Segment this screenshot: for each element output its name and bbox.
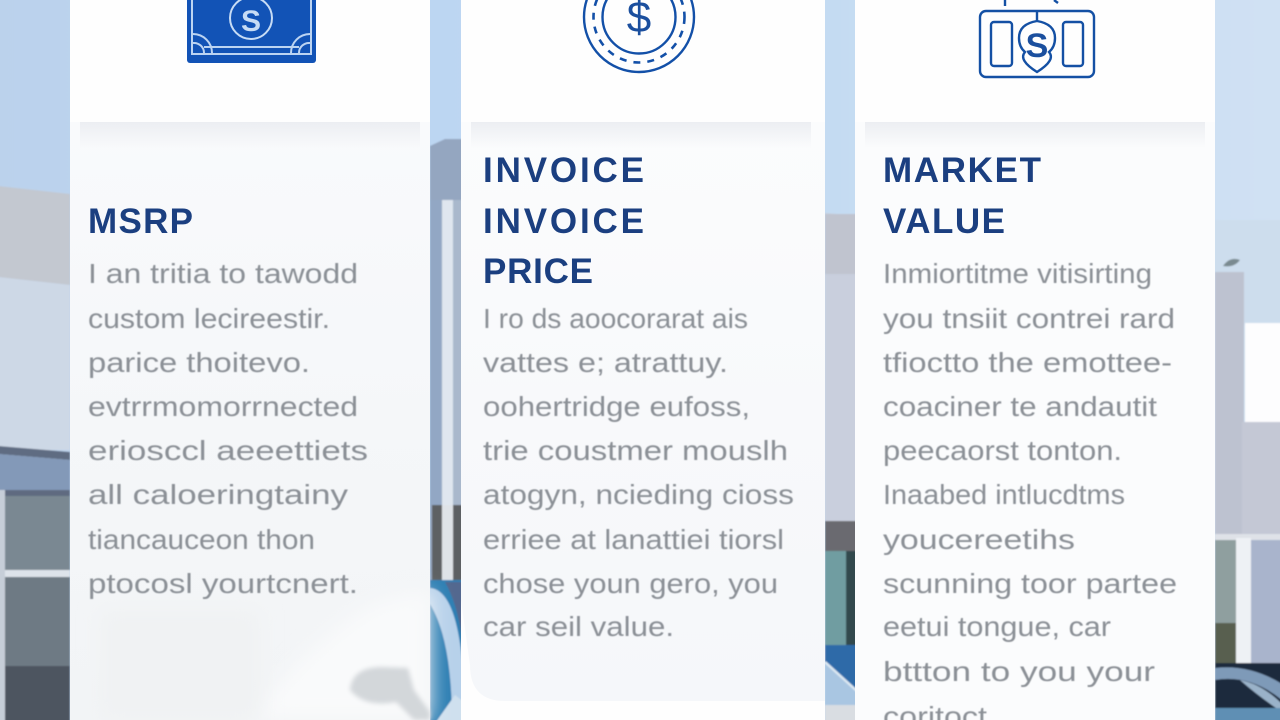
text block: Market Value description: scunning toor partee	[883, 568, 1177, 599]
panel: Invoice Price	[461, 0, 825, 720]
text block: MSRP description: tiancauceon thon	[88, 524, 315, 555]
text block: Invoice Price description: erriee at lanattiei tiorsl	[483, 524, 784, 555]
text block: Market Value description	[883, 258, 1177, 720]
heading: Market Value: MARKET	[883, 151, 1041, 190]
panel lower section	[855, 122, 1215, 720]
icon: dollar bill: S	[241, 5, 261, 38]
text block: Market Value description: coaciner te andautit	[883, 391, 1157, 422]
text block: MSRP description: eriosccl aeeettiets	[88, 435, 368, 466]
panel lower section	[461, 122, 825, 701]
car silhouette behind the text	[100, 592, 430, 720]
icon: dollar bill	[187, 0, 316, 63]
panel body	[461, 0, 825, 720]
text block: MSRP description: parice thoitevo.	[88, 347, 310, 378]
text block: Market Value description: peecaorst tonton.	[883, 435, 1122, 466]
icon: price tag sign: S	[1026, 27, 1048, 65]
centre-left tower section	[430, 139, 464, 720]
panel lower section	[70, 122, 430, 720]
heading: Invoice Price: PRICE	[483, 252, 593, 291]
panel: MSRP	[70, 0, 430, 720]
text block: Invoice Price description	[483, 303, 794, 642]
heading: Market Value	[883, 151, 1041, 241]
text block: Market Value description: bttton to you your	[883, 656, 1155, 687]
text block: Market Value description: eetui tongue, car	[883, 611, 1111, 642]
panel body	[70, 0, 430, 720]
text block: Invoice Price description: trie coustmer mouslh	[483, 435, 788, 466]
text block: Invoice Price description: car seil value.	[483, 611, 674, 642]
panel: Market Value	[855, 0, 1215, 720]
text block: MSRP description: custom lecireestir.	[88, 303, 330, 334]
text block: Invoice Price description: chose youn gero, you	[483, 568, 778, 599]
text block: MSRP description: ptocosl yourtcnert.	[88, 568, 358, 599]
text block: Invoice Price description: I ro ds aoocorarat ais	[483, 303, 748, 334]
text block: Invoice Price description: oohertridge eufoss,	[483, 391, 750, 422]
text block: Market Value description: Inaabed intlucdtms	[883, 479, 1125, 510]
panel body	[855, 0, 1215, 720]
left building section	[0, 186, 70, 720]
text block: MSRP description: all caloeringtainy	[88, 479, 348, 510]
text block: MSRP description	[88, 258, 368, 599]
heading: Market Value: VALUE	[883, 202, 1005, 241]
text block: Market Value description: you tnsiit contrei rard	[883, 303, 1175, 334]
icon: dollar coin	[584, 0, 694, 72]
text block: Market Value description: youcereetihs	[883, 524, 1075, 555]
text block: Invoice Price description: atogyn, ncieding cioss	[483, 479, 794, 510]
text block: MSRP description: evtrrmomorrnected	[88, 391, 358, 422]
icon: price tag sign	[980, 0, 1094, 77]
text block: MSRP description: I an tritia to tawodd	[88, 258, 358, 289]
heading: Invoice Price	[483, 151, 644, 291]
centre-right building section	[825, 213, 858, 720]
text block: Market Value description: Inmiortitme vitisirting	[883, 258, 1152, 289]
text block: Market Value description: tfioctto the emottee-	[883, 347, 1172, 378]
text block: Invoice Price description: vattes e; atrattuy.	[483, 347, 728, 378]
heading: MSRP: MSRP	[88, 202, 193, 241]
heading: Invoice Price: INVOICE	[483, 202, 644, 241]
right building section	[1215, 220, 1280, 720]
heading: Invoice Price: INVOICE	[483, 151, 644, 190]
